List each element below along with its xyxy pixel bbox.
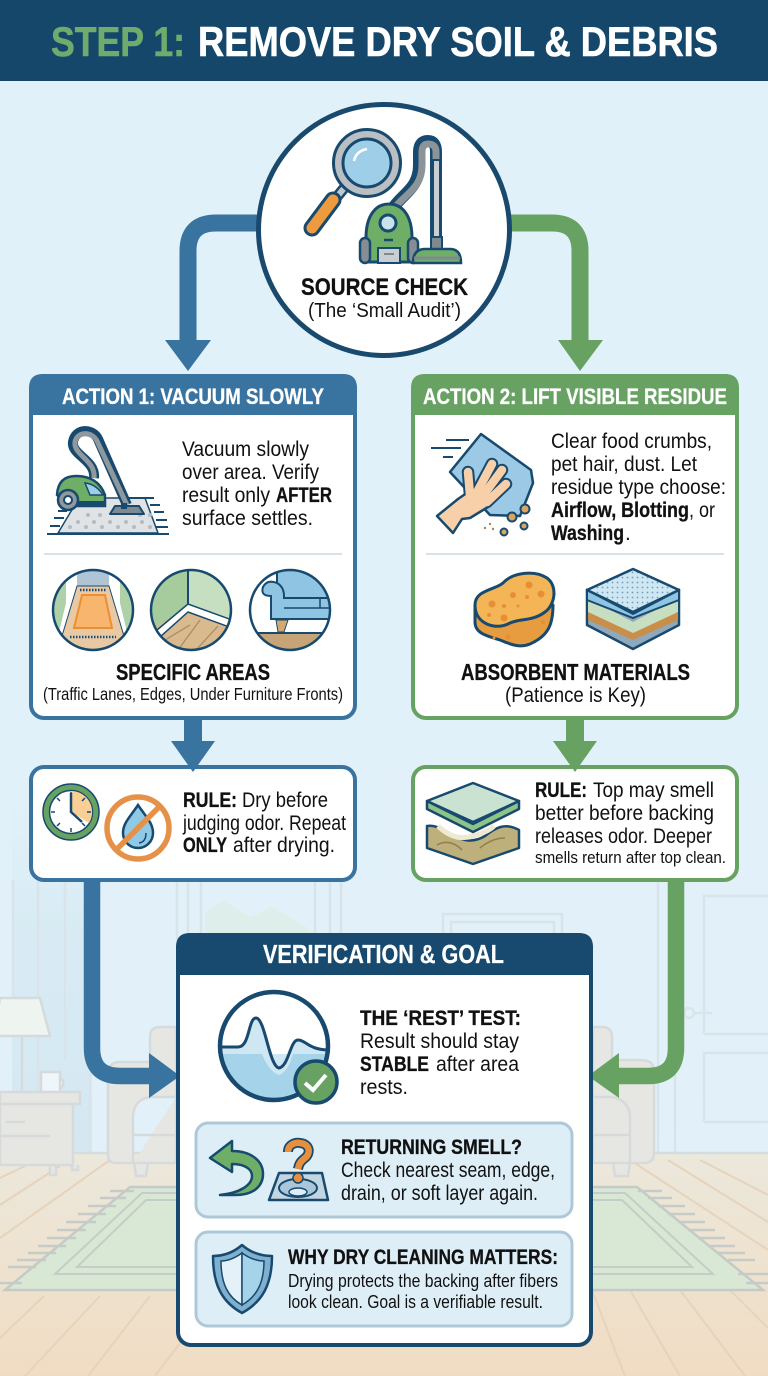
icon: layered material <box>587 569 679 649</box>
icon: stable wave <box>220 992 337 1104</box>
text: why dry cleaning matters: look clean. Goal is a verifiable result. <box>288 1291 543 1312</box>
arrow: action 2 to rule <box>566 718 584 743</box>
icon: traffic lane rug <box>50 568 136 652</box>
text: vacuum instructions: Vacuum slowly <box>182 438 309 461</box>
text: rule 2 <box>535 779 726 867</box>
callout: why dry cleaning matters <box>196 1232 572 1326</box>
arrow: source check to action 2 <box>506 223 603 371</box>
arrow: rule 2 to verification <box>588 880 676 1098</box>
text: returning smell <box>341 1136 555 1205</box>
label: source check: SOURCE CHECK <box>301 274 469 301</box>
icon: wall edge corner <box>150 568 232 650</box>
text: rule 2: better before backing <box>535 802 714 825</box>
icon: magnifying glass <box>312 130 400 228</box>
text: rest test: THE ‘REST’ TEST: <box>360 1007 521 1030</box>
panel: rule 2 <box>413 741 737 880</box>
text: returning smell: Check nearest seam, edge, <box>341 1159 555 1182</box>
text: rule 1: ONLY <box>183 834 227 857</box>
text: residue instructions: Airflow, Blotting <box>551 499 689 522</box>
text: rule 1: RULE: <box>183 789 237 812</box>
text: vacuum instructions: result only <box>182 484 270 507</box>
text: residue instructions: pet hair, dust. Let <box>551 453 697 476</box>
text: rest test <box>360 1007 521 1099</box>
text: rule 2: RULE: <box>535 779 587 802</box>
text: rule 1: after drying. <box>233 834 335 857</box>
arrow head: action 1 <box>171 741 215 772</box>
text: residue instructions: , or <box>689 499 715 522</box>
icon: shield <box>213 1245 272 1313</box>
text: rest test: STABLE <box>360 1053 429 1076</box>
panel: verification and goal <box>176 933 593 1345</box>
text: why dry cleaning matters: WHY DRY CLEANING MATTERS: <box>288 1246 558 1269</box>
icon: vacuum on rug <box>47 431 169 534</box>
text: rule 2: smells return after top clean. <box>535 849 726 867</box>
text: residue instructions: residue type choose: <box>551 476 726 499</box>
text: vacuum instructions: over area. Verify <box>182 461 319 484</box>
arrow: rule 1 to verification <box>92 880 180 1098</box>
icon: sponge <box>475 573 554 646</box>
text: returning smell: RETURNING SMELL? <box>341 1136 522 1159</box>
header bar <box>0 0 768 81</box>
icon: clock <box>43 784 99 840</box>
icon: top and backing layers <box>427 783 519 864</box>
text: rest test: Result should stay <box>360 1030 519 1053</box>
text: vacuum instructions: AFTER <box>276 484 332 507</box>
panel: rule 1 <box>31 741 355 880</box>
text: rule 2: releases odor. Deeper <box>535 825 712 848</box>
heading: specific areas: SPECIFIC AREAS <box>116 659 270 685</box>
text: rule 2: Top may smell <box>593 779 714 802</box>
text: rest test: rests. <box>360 1076 408 1099</box>
panel: action 2 <box>411 374 739 718</box>
panel: action 1 <box>29 374 357 718</box>
text: rule 1: Dry before <box>242 789 328 812</box>
text: rest test: after area <box>436 1053 519 1076</box>
heading: absorbent materials: ABSORBENT MATERIALS <box>461 659 690 685</box>
text: vacuum instructions: surface settles. <box>182 507 313 530</box>
heading: action 1: ACTION 1: VACUUM SLOWLY <box>62 384 324 409</box>
text: residue instructions: Washing <box>551 522 624 545</box>
text: rule 1: judging odor. Repeat <box>182 812 346 835</box>
text: why dry cleaning matters <box>288 1246 558 1312</box>
label: small audit: (The ‘Small Audit’) <box>308 300 461 322</box>
icon: return arrow <box>210 1141 263 1195</box>
text: rule 1 <box>182 789 346 857</box>
source check circle <box>258 104 510 356</box>
heading: verification: VERIFICATION & GOAL <box>263 941 504 969</box>
text: area list: (Traffic Lanes, Edges, Under Furniture Fronts) <box>43 684 343 704</box>
text: residue instructions: . <box>625 522 631 545</box>
icon: sofa front <box>250 568 332 655</box>
icon: drain question <box>269 1143 328 1200</box>
icon: canister vacuum <box>360 141 461 263</box>
arrow head: action 2 <box>553 741 597 772</box>
text: residue instructions <box>551 430 726 545</box>
arrow: action 1 to rule <box>184 718 202 743</box>
arrow: source check to action 1 <box>165 223 262 371</box>
icon: no water <box>107 797 169 859</box>
text: why dry cleaning matters: Drying protects the backing after fibers <box>288 1270 558 1291</box>
title: STEP 1: <box>51 18 185 65</box>
text: vacuum instructions <box>182 438 332 530</box>
text: residue instructions: Clear food crumbs, <box>551 430 712 453</box>
callout: returning smell <box>196 1123 572 1217</box>
text: returning smell: drain, or soft layer again. <box>341 1182 538 1205</box>
icon: hand wiping <box>431 434 533 536</box>
text: patience: (Patience is Key) <box>505 684 646 707</box>
